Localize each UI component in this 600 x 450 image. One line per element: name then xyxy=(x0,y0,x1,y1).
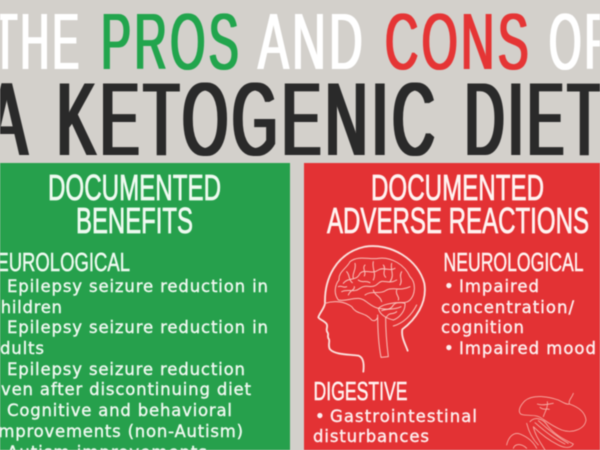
benefits heading: DOCUMENTED xyxy=(48,167,221,208)
neurological reactions list: • xyxy=(444,277,454,296)
icon: digestive organs xyxy=(507,393,586,450)
neurological reactions list xyxy=(441,277,596,358)
neurological benefits list: Epilepsy seizure reduction xyxy=(7,360,245,379)
digestive reactions list: • xyxy=(315,407,325,426)
digestive reactions list: Gastrointestinal xyxy=(330,407,477,426)
neurological reactions list: Impaired mood xyxy=(459,339,596,358)
adverse reactions heading xyxy=(327,167,589,241)
neurological reactions list: • xyxy=(444,339,454,358)
title xyxy=(0,0,600,178)
neurological benefits list xyxy=(0,277,268,450)
panel: documented adverse reactions xyxy=(304,163,600,450)
digestive subheading: DIGESTIVE xyxy=(314,376,408,406)
neurological benefits list: improvements (non-Autism) xyxy=(0,422,243,441)
benefits heading: BENEFITS xyxy=(76,200,193,241)
neurological benefits list: Epilepsy seizure reduction in xyxy=(7,318,268,337)
panel: documented benefits xyxy=(0,163,290,450)
icon: head with brain xyxy=(318,246,425,372)
digestive reactions list: disturbances xyxy=(313,427,429,446)
neurological benefits list: Epilepsy seizure reduction in xyxy=(7,277,268,296)
neurological reactions list: concentration/ xyxy=(441,298,574,317)
neurological reactions list: Impaired xyxy=(459,277,539,296)
neurological benefits list: Cognitive and behavioral xyxy=(7,401,232,420)
benefits heading xyxy=(48,167,221,241)
neurological reactions list: cognition xyxy=(441,318,524,337)
digestive reactions list xyxy=(313,407,477,446)
